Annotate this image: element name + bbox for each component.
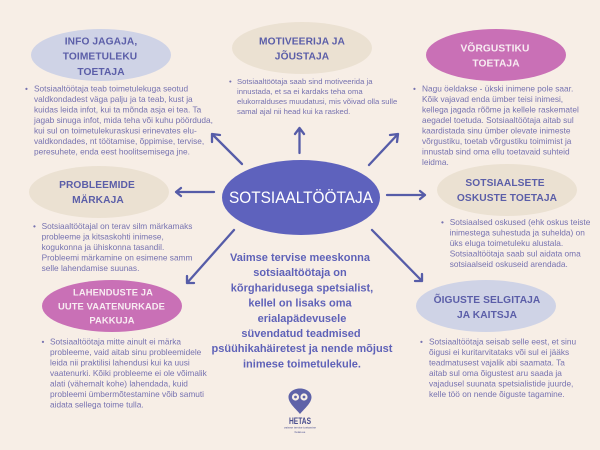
text: sotsiaalsete oskuste toetaja: üks eluga toimetuleku alustala. — [450, 238, 563, 248]
logo: HETAS — [284, 388, 316, 434]
text: info jagaja: jagab sinuga infot, mida teha või kuhu pöörduda, — [33, 115, 213, 125]
text: võrgustiku toetaja: innustab sind oma ellu toetavaid suhteid — [422, 146, 570, 156]
arrow: to info jagaja — [212, 134, 242, 164]
text: võrgustiku toetaja: leidma. — [422, 157, 449, 167]
panel: probleemide märkaja — [29, 166, 192, 273]
central description — [212, 252, 393, 370]
text: õiguste selgitaja: vajadusel suunata spetsialistide juurde, — [429, 378, 573, 388]
text: õiguste selgitaja: • — [420, 336, 423, 346]
heading: lahenduste pakkuja: PAKKUJA — [89, 314, 135, 326]
arrow: to võrgustiku — [369, 134, 398, 165]
logo: HETAS: vaimse tervise toetamine — [284, 426, 316, 430]
arrow: to motiveerija — [295, 128, 304, 153]
text: õiguste selgitaja: Sotsiaaltöötaja seisab selle eest, et sinu — [429, 336, 577, 346]
panel: võrgustiku toetaja — [413, 29, 579, 167]
text: probleemide märkaja: • — [33, 221, 36, 231]
heading: info jagaja — [31, 29, 171, 81]
text: motiveerija: • — [229, 77, 232, 86]
heading: motiveerija: JÕUSTAJA — [275, 50, 330, 62]
heading: motiveerija — [232, 22, 372, 74]
text: õiguste selgitaja — [420, 336, 577, 399]
text: info jagaja: valdkondades, nt töötamise, õppimise, tervise, — [34, 136, 204, 146]
text: probleemide märkaja: Probleemi märkamine on esimene samm — [42, 252, 192, 262]
text: sotsiaalsete oskuste toetaja: sotsiaalseid oskuseid arendada. — [450, 259, 568, 269]
text: info jagaja — [25, 84, 213, 156]
text: võrgustiku toetaja: kaardistada sinu ümber olevate inimeste — [422, 126, 571, 136]
text: sotsiaalsete oskuste toetaja: • — [441, 217, 444, 227]
text: motiveerija: elukorralduses muudatusi, mis võivad olla sulle — [237, 97, 397, 106]
panel: info jagaja — [25, 29, 213, 156]
central description: sotsiaaltöötaja on — [253, 267, 347, 279]
heading: õiguste selgitaja: JA KAITSJA — [457, 310, 518, 321]
text: lahenduste pakkuja: • — [42, 336, 44, 346]
panel: lahenduste pakkuja — [42, 280, 208, 410]
text: sotsiaalsete oskuste toetaja: Sotsiaaltöötaja saab sul aidata oma — [450, 248, 581, 258]
text: lahenduste pakkuja: alati (vähemalt kohe) lahendada, kuid — [50, 378, 188, 388]
central description: erialapädevusele — [258, 313, 346, 325]
heading: motiveerija: MOTIVEERIJA JA — [259, 36, 346, 48]
heading: probleemide märkaja — [29, 166, 169, 218]
heading: lahenduste pakkuja: LAHENDUSTE JA — [73, 286, 153, 297]
central description: inimese toimetulekule. — [243, 358, 361, 370]
central description: kellel on lisaks oma — [248, 298, 353, 310]
text: lahenduste pakkuja: probleeme, vaid aitab sinu probleemidele — [50, 347, 202, 357]
text: probleemide märkaja: selle lahendamise suunas. — [42, 263, 139, 273]
heading: võrgustiku toetaja: VÕRGUSTIKU — [461, 42, 529, 54]
heading: õiguste selgitaja: ÕIGUSTE SELGITAJA — [434, 293, 541, 306]
central description: Vaimse tervise meeskonna — [230, 252, 371, 264]
text: lahenduste pakkuja: probleemi ümbermõtestamine võib samuti — [50, 389, 204, 399]
text: info jagaja: valdkondadest väga palju ja ta teab, kust ja — [34, 94, 193, 104]
text: info jagaja: • — [25, 84, 28, 94]
heading: info jagaja: TOIMETULEKU — [63, 52, 137, 62]
text: info jagaja: kuidas leida infot, kui ta mõnda asja ei tea. Ta — [34, 104, 202, 114]
heading: info jagaja: TOETAJA — [77, 67, 125, 78]
text: võrgustiku toetaja: kellega jagada rõõme ja kellele raskematel — [422, 104, 579, 114]
text: võrgustiku toetaja: võrgustiku, toetab võrgustiku toimimist ja — [422, 136, 572, 146]
text: motiveerija: Sotsiaaltöötaja saab sind motiveerida ja — [237, 77, 373, 86]
central description: psüühikahäiretest ja nende mõjust — [212, 343, 393, 355]
text: probleemide märkaja: kogukonna ja ühiskonna tasandil. — [42, 242, 164, 252]
text: info jagaja: peresuhete, enda eest hoolitsemisega jne. — [34, 146, 190, 156]
text: probleemide märkaja — [33, 221, 192, 273]
text: probleemide märkaja: Sotsiaaltöötajal on terav silm märkamaks — [42, 221, 192, 231]
heading: sotsiaalsete oskuste toetaja — [437, 164, 577, 216]
arrow: to õiguste — [372, 230, 422, 281]
text: õiguste selgitaja: teadmatusest vajalik abi saamata. Ta — [429, 358, 565, 368]
heading: probleemide märkaja: PROBLEEMIDE — [59, 180, 135, 191]
text: motiveerija: innustada, et sa ei kardaks teha oma — [237, 87, 363, 96]
text: võrgustiku toetaja: Kõik vajavad enda ümber teisi inimesi, — [422, 94, 563, 104]
icon: owl pin — [288, 388, 312, 414]
central title — [222, 160, 380, 235]
text: probleemide märkaja: probleeme ja kitsaskohti inimese, — [42, 231, 164, 241]
heading: lahenduste pakkuja: UUTE VAATENURKADE — [58, 300, 165, 312]
text: õiguste selgitaja: kelle töö on nende õiguste tagamine. — [429, 389, 565, 399]
text: lahenduste pakkuja: vaatenurki. Kõiki probleeme ei ole võimalik — [50, 368, 208, 378]
text: motiveerija — [229, 77, 397, 116]
text: õiguste selgitaja: aitab sul oma õigustest aru saada ja — [429, 368, 562, 378]
panel: sotsiaalsete oskuste toetaja — [437, 164, 591, 269]
heading: võrgustiku toetaja: TOETAJA — [472, 58, 520, 70]
central title: SOTSIAALTÖÖTAJA — [229, 188, 374, 207]
arrow: to probleemide — [176, 188, 214, 196]
panel: motiveerija — [229, 22, 397, 116]
text: võrgustiku toetaja: Nagu öeldakse - ükski inimene pole saar. — [422, 84, 573, 94]
heading: sotsiaalsete oskuste toetaja: SOTSIAALSETE — [465, 178, 545, 189]
text: lahenduste pakkuja: Sotsiaaltöötaja mitte ainult ei märka — [50, 336, 181, 346]
heading: võrgustiku toetaja — [426, 29, 566, 81]
logo: HETAS: HETAS — [289, 416, 311, 427]
heading: õiguste selgitaja — [416, 280, 556, 332]
text: lahenduste pakkuja — [42, 336, 208, 410]
panel: õiguste selgitaja — [416, 280, 577, 399]
central description: süvendatud teadmised — [241, 328, 361, 340]
text: sotsiaalsete oskuste toetaja — [441, 217, 591, 269]
text: õiguste selgitaja: õigusi ei kuritarvitataks või sul ei jääks — [429, 347, 569, 357]
text: info jagaja: kui sul on toimetulekuraskusi erinevates elu- — [34, 126, 197, 136]
arrow: to sotsiaalsete — [387, 191, 425, 199]
text: motiveerija: samal ajal nii head kui ka rasked. — [237, 107, 350, 116]
heading: probleemide märkaja: MÄRKAJA — [72, 193, 124, 206]
text: võrgustiku toetaja — [413, 84, 579, 167]
text: lahenduste pakkuja: leida nii praktilisi lahendusi kui ka uusi — [50, 358, 190, 368]
text: võrgustiku toetaja: • — [413, 84, 416, 94]
text: sotsiaalsete oskuste toetaja: Sotsiaalsed oskused (ehk oskus teiste — [450, 217, 591, 227]
text: info jagaja: Sotsiaaltöötaja teab toimetulekuga seotud — [34, 84, 188, 94]
heading: lahenduste pakkuja — [42, 280, 182, 332]
arrow: to lahenduste — [187, 230, 234, 283]
heading: info jagaja: INFO JAGAJA, — [65, 36, 137, 48]
text: lahenduste pakkuja: aidata sellega toime tulla. — [50, 400, 144, 410]
text: võrgustiku toetaja: aegadel toetuda. Sotsiaaltöötaja aitab sul — [422, 115, 574, 125]
heading: sotsiaalsete oskuste toetaja: OSKUSTE TOETAJA — [457, 193, 558, 204]
logo: HETAS: hetas.ee — [295, 430, 306, 434]
central description: kõrgharidusega spetsialist, — [231, 282, 373, 294]
text: sotsiaalsete oskuste toetaja: inimestega suhestuda ja suhelda) on — [450, 228, 585, 238]
